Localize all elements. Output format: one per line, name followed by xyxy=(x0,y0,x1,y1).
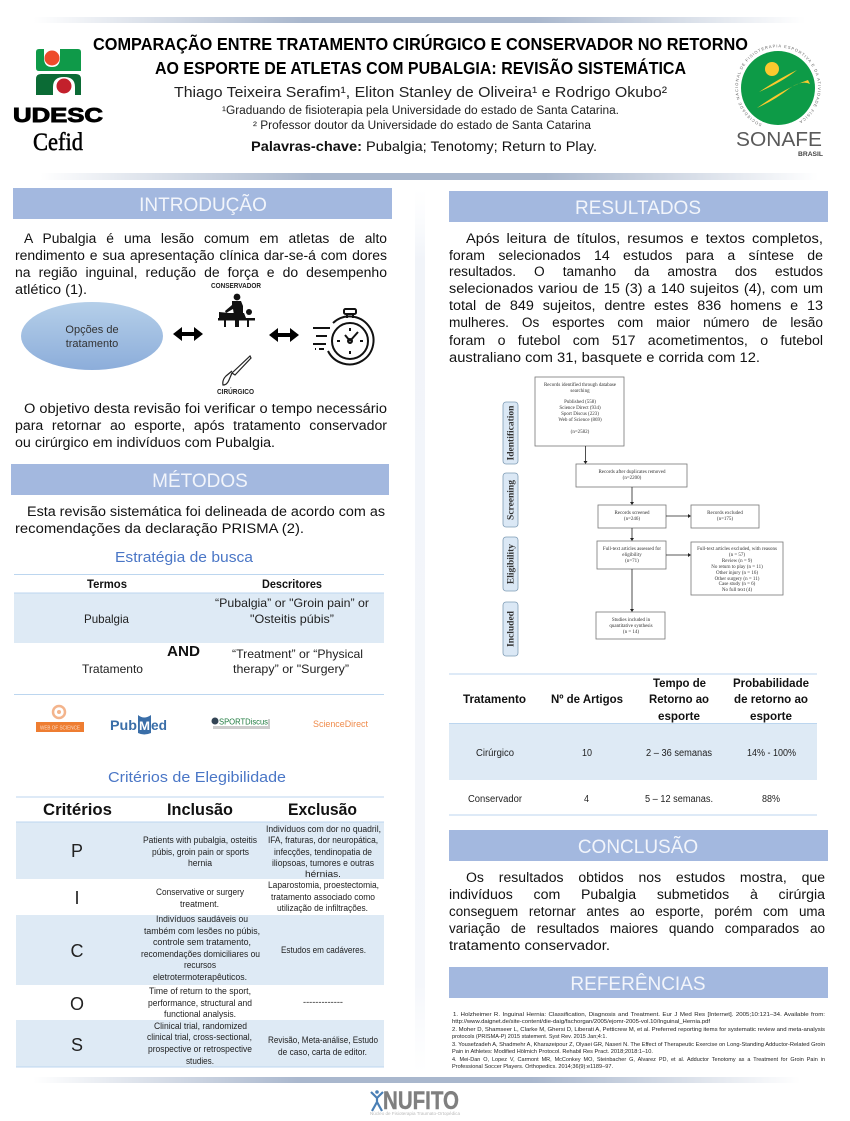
table rows: 5 – 12 semanas. xyxy=(645,794,713,805)
table rows: Cirúrgico xyxy=(476,748,514,759)
text block: referências: 1. Holzheimer R. Inguinal Hernia: Classification, Diagnosis and Treatment. Eur J Med Res [Internet]. 2005;10:121–34. Available from: xyxy=(453,1012,825,1018)
text block: introdução: atlético (1). xyxy=(15,282,87,297)
box: identification: Sport Discus (223) xyxy=(561,412,599,417)
box: excluded: Records excluded xyxy=(707,511,743,516)
criteria letters: C xyxy=(70,941,84,961)
inclusion column: hernia xyxy=(188,858,212,868)
text block: conclusão: conseguem retornar antes ao esporte, porém com uma xyxy=(449,904,825,919)
inclusion column: também com lesões no púbis, xyxy=(144,926,260,936)
heading: introdução xyxy=(13,188,392,219)
ellipse: opções de tratamento xyxy=(21,302,163,370)
text block: referências: Professional Soccer Players. Orthopedics. 2014;36(9):e1189–97. xyxy=(452,1064,613,1070)
criteria letters: I xyxy=(74,888,80,908)
text block: métodos: Esta revisão sistemática foi delineada de acordo com as xyxy=(27,504,385,519)
heading: resultados xyxy=(449,191,828,222)
box: screened: Records screened xyxy=(614,511,650,516)
table header xyxy=(463,676,809,723)
text block: introdução: na região inguinal, redução de força e do desempenho xyxy=(15,265,387,280)
table header: Tratamento xyxy=(463,692,526,706)
logo: PubMed: M xyxy=(139,719,150,733)
text block: referências: Pain in Athletes: Modified Hölmich Protocol. Rehabil Res Pract. 2018;2018:1–10. xyxy=(452,1049,653,1055)
table header: esporte xyxy=(750,709,792,723)
criteria letters: P xyxy=(71,841,83,861)
text block: referências: 3. Yousefzadeh A, Shadmehr A, Kharazeipour Z, Olyaei GR, Naseri N. The Effect of Therapeutic Exercise on Long-Standing Adductor-Related Groin xyxy=(452,1042,825,1048)
logos: databases xyxy=(36,706,368,734)
table header: Retorno ao xyxy=(649,692,709,706)
diagram: opções de tratamento xyxy=(21,283,374,396)
panel: referências xyxy=(449,967,828,1070)
text block: métodos xyxy=(15,504,385,536)
keywords: Palavras-chave: Pubalgia; Tenotomy; Return to Play. xyxy=(251,138,597,154)
heading: métodos: MÉTODOS xyxy=(152,471,248,492)
exclusion column: iliopsoas, tumores e outras xyxy=(272,858,374,868)
box: identification: searching xyxy=(570,389,590,394)
table rows: 14% - 100% xyxy=(747,748,796,759)
panel: métodos xyxy=(11,464,389,1067)
box: included: (n = 14) xyxy=(623,630,639,635)
text block: objetivo: O objetivo desta revisão foi verificar o tempo necessário xyxy=(24,401,387,416)
logo: SPORTDiscus: SPORTDiscus xyxy=(219,718,268,726)
text block: referências: 2. Moher D, Shamseer L, Clarke M, Ghersi D, Liberati A, Petticrew M, et al. Preferred reporting items for systematic review and meta-analysis xyxy=(452,1027,825,1033)
authors: Thiago Teixeira Serafim¹, Eliton Stanley de Oliveira¹ e Rodrigo Okubo² xyxy=(174,84,667,101)
inclusion column: recursos xyxy=(184,960,216,970)
box: identification: Web of Science (869) xyxy=(558,418,602,423)
label: conservador: CONSERVADOR xyxy=(211,283,261,290)
affiliations xyxy=(222,105,619,132)
box: excluded with reasons: Other surgery (n = 11) xyxy=(715,577,760,582)
exclusion column: infecções, tendinopatia de xyxy=(274,847,372,857)
label: cirúrgico: CIRÚRGICO xyxy=(217,387,255,396)
table: estratégia de busca xyxy=(14,574,384,694)
box: excluded with reasons: (n = 57) xyxy=(729,553,745,558)
text block: resultados: foram o futebol com 517 acometimentos, o futebol xyxy=(449,333,823,348)
box: identification: Records identified through database xyxy=(544,383,617,388)
exclusion column: ------------- xyxy=(303,997,343,1007)
stage labels: Eligibility xyxy=(506,544,516,584)
heading: referências: REFERÊNCIAS xyxy=(570,973,706,995)
inclusion column: prospective or retrospective xyxy=(148,1044,252,1054)
box: excluded with reasons: No return to play (n = 11) xyxy=(711,565,763,570)
text block: referências: 4. Mei-Dan O, Lopez V, Carmont MR, McConkey MO, Steinbacher G, Alvarez PD, et al. Adductor Tenotomy as a Treatment for Groin Pain in xyxy=(452,1057,825,1063)
stage labels xyxy=(503,402,518,656)
criteria letters: S xyxy=(71,1035,83,1055)
box: screened: (n=246) xyxy=(624,517,640,522)
exclusion column: Revisão, Meta-análise, Estudo xyxy=(268,1035,378,1045)
arrows xyxy=(584,446,691,612)
logo: UDESC Cefid: Cefid xyxy=(33,129,83,156)
icon: stopwatch xyxy=(313,309,374,364)
table header: Critérios xyxy=(43,800,112,819)
table: estratégia de busca: therapy” or "Surgery” xyxy=(233,662,349,676)
logo: SPORTDiscus xyxy=(210,716,270,729)
panel: introdução xyxy=(13,188,392,450)
text block: introdução: rendimento e sua apresentação clínica dar-se-á com dores xyxy=(15,248,387,263)
flowchart: PRISMA xyxy=(503,377,783,656)
inclusion column: Indivíduos saudáveis ou xyxy=(156,914,248,924)
text block: resultados: selecionados variou de 15 (3) a 140 sujeitos (4), com um xyxy=(449,281,823,296)
box: duplicates removed xyxy=(576,464,687,487)
stage labels: Identification xyxy=(506,405,516,460)
exclusion column: IFA, fraturas, dor neuropática, xyxy=(268,835,378,845)
heading: critérios de elegibilidade: Critérios de Elegibilidade xyxy=(108,769,286,786)
stage labels: Included xyxy=(506,610,516,647)
table header xyxy=(43,800,357,819)
title xyxy=(93,33,748,78)
table rows: 4 xyxy=(584,794,589,805)
box: identification xyxy=(535,377,624,446)
table rows: 88% xyxy=(762,794,780,805)
inclusion column: púbis, groin pain or sports xyxy=(152,847,249,857)
inclusion column: Clinical trial, randomized xyxy=(154,1021,247,1031)
box: included: quantitative synthesis xyxy=(609,624,653,629)
box: included xyxy=(596,612,665,639)
text block: resultados: australiano com 31, basquete e corrida com 12. xyxy=(449,350,760,365)
inclusion column: performance, structural and xyxy=(148,998,252,1008)
inclusion column: eletrotermoterapêuticos. xyxy=(153,972,247,982)
arrow: double xyxy=(173,327,203,341)
table rows xyxy=(468,748,796,805)
title: AO ESPORTE DE ATLETAS COM PUBALGIA: REVISÃO SISTEMÁTICA xyxy=(155,57,686,78)
table header: de retorno ao xyxy=(734,692,808,706)
text block: conclusão: tratamento conservador. xyxy=(449,938,610,953)
table header: Exclusão xyxy=(288,800,357,819)
logo: Web of Science: WEB OF SCIENCE xyxy=(40,726,81,732)
table header: Nº de Artigos xyxy=(551,692,623,706)
box: excluded xyxy=(691,505,759,528)
text block: referências: http://www.daignet.de/site-content/die-daig/fachorgan/2005/ejomr-2005-vol.10/Inguinal_Hernia.pdf xyxy=(452,1019,710,1025)
logo: SONAFE: SOCIEDADE NACIONAL DE FISIOTERAPIA ESPORTIVA E DA ATIVIDADE FÍSICA xyxy=(735,44,821,126)
table: estratégia de busca: Descritores xyxy=(262,577,322,591)
inclusion column: Conservative or surgery xyxy=(156,887,244,897)
table header: esporte xyxy=(658,709,700,723)
inclusion column: Time of return to the sport, xyxy=(149,986,251,996)
table: estratégia de busca: “Treatment” or “Physical xyxy=(232,647,363,661)
text block: conclusão: variação de resultados maiores quando comparados ao xyxy=(449,921,825,936)
logo: Web of Science xyxy=(36,706,84,732)
box: eligibility xyxy=(597,541,666,569)
inclusion column: recomendações domiciliares ou xyxy=(141,949,260,959)
table header: Probabilidade xyxy=(733,676,809,690)
inclusion column: functional analysis. xyxy=(164,1009,236,1019)
logo: PubMed: ed xyxy=(151,717,167,733)
table: estratégia de busca: “Pubalgia” or "Groin pain” or xyxy=(215,596,369,610)
box: eligibility: Full-text articles assessed for xyxy=(603,547,661,552)
exclusion column: Laparostomia, proestectomia, xyxy=(268,880,379,890)
inclusion column xyxy=(141,835,260,1066)
text block: referências: protocols (PRISMA-P) 2015 statement. Syst Rev. 2015 Jan;4:1. xyxy=(452,1034,607,1040)
text block: conclusão xyxy=(449,870,826,953)
icon: scalpel xyxy=(223,356,251,385)
inclusion column: clinical trial, cross-sectional, xyxy=(147,1032,252,1042)
logo: SONAFE: BRASIL xyxy=(798,151,823,158)
heading: referências xyxy=(449,967,828,998)
criteria letters xyxy=(70,841,84,1055)
table: estratégia de busca: Termos xyxy=(87,577,127,591)
affiliations: ² Professor doutor da Universidade do estado de Santa Catarina xyxy=(253,120,592,132)
logo: NUFITO: Núcleo de Fisioterapia Traumato-Ortopédica xyxy=(370,1111,461,1116)
box: excluded with reasons: Case study (n = 6) xyxy=(719,582,756,587)
table: estratégia de busca: "Osteitis púbis” xyxy=(250,612,334,626)
text block: objetivo: ou cirúrgico em indivíduos com Pubalgia. xyxy=(15,435,275,450)
affiliations: ¹Graduando de fisioterapia pela Universidade do estado de Santa Catarina. xyxy=(222,105,619,117)
inclusion column: Patients with pubalgia, osteitis xyxy=(143,835,257,845)
heading: conclusão: CONCLUSÃO xyxy=(578,836,698,858)
box: screened xyxy=(598,505,666,528)
text block: conclusão: indivíduos com Pubalgia submetidos à cirúrgia xyxy=(449,887,826,902)
table rows: 2 – 36 semanas xyxy=(646,748,712,759)
arrow: double xyxy=(269,328,299,342)
heading: introdução: INTRODUÇÃO xyxy=(139,194,267,216)
logo: UDESC Cefid xyxy=(13,49,103,156)
table: resultados xyxy=(449,674,817,815)
table: critérios de elegibilidade xyxy=(16,797,384,1067)
heading: resultados: RESULTADOS xyxy=(575,198,701,219)
exclusion column: tratamento associado como xyxy=(271,892,375,902)
logo: PubMed xyxy=(110,715,167,734)
text block: referências xyxy=(452,1012,825,1070)
table: estratégia de busca: Pubalgia xyxy=(84,612,129,626)
logo: PubMed: Pub xyxy=(110,717,137,733)
icon: massage therapy xyxy=(218,294,255,327)
exclusion column: utilização de infiltrações. xyxy=(277,903,368,913)
label: AND: AND xyxy=(167,643,200,660)
logo: ScienceDirect: ScienceDirect xyxy=(313,719,368,730)
logo: NUFITO: NUFITO xyxy=(383,1087,459,1115)
title: COMPARAÇÃO ENTRE TRATAMENTO CIRÚRGICO E CONSERVADOR NO RETORNO xyxy=(93,33,748,54)
heading: conclusão xyxy=(449,830,828,861)
box: included: Studies included in xyxy=(612,618,651,623)
text block: resultados: total de 849 sujeitos, dentre estes 836 homens e 13 xyxy=(449,298,823,313)
inclusion column: studies. xyxy=(186,1056,214,1066)
box: excluded with reasons: Full-text articles excluded, with reasons xyxy=(697,547,777,552)
text block: objetivo xyxy=(15,401,388,450)
box: excluded with reasons: No full text (4) xyxy=(722,588,752,593)
table header: Inclusão xyxy=(167,800,233,819)
text block: introdução xyxy=(15,231,387,297)
table header: Tempo de xyxy=(653,676,706,690)
panel: resultados xyxy=(449,191,828,815)
text block: resultados: Após leitura de títulos, resumos e textos completos, xyxy=(466,231,823,246)
box: duplicates removed: (n=2200) xyxy=(623,476,642,481)
box: identification: Science Direct (934) xyxy=(559,406,601,411)
text block: resultados: resultados. O tamanho da amostra dos estudos xyxy=(449,264,823,279)
text block: introdução: A Pubalgia é uma lesão comum em atletas de alto xyxy=(24,231,387,246)
ellipse: opções de tratamento: Opções de xyxy=(65,324,119,336)
text block: resultados: mulheres. Os esportes com maior número de lesão xyxy=(449,315,823,330)
table: estratégia de busca: Tratamento xyxy=(82,662,143,676)
logo: UDESC Cefid: UDESC xyxy=(13,105,103,127)
exclusion column: Estudos em cadáveres. xyxy=(281,945,366,955)
stage labels: Screening xyxy=(506,480,516,520)
box: identification: Published (558) xyxy=(564,400,596,405)
text block: objetivo: para retornar ao esporte, após tratamento conservador xyxy=(15,418,388,433)
table rows: 10 xyxy=(582,748,592,759)
box: excluded: (n=175) xyxy=(717,517,733,522)
text block: resultados xyxy=(449,231,823,365)
heading: estratégia de busca: Estratégia de busca xyxy=(115,549,254,566)
logo: SONAFE: SONAFE xyxy=(736,129,822,151)
box: duplicates removed: Records after duplicates removed xyxy=(598,470,666,475)
ellipse: opções de tratamento: tratamento xyxy=(66,338,118,350)
box: excluded with reasons: Other injury (n = 16) xyxy=(716,571,758,576)
heading: métodos xyxy=(11,464,389,495)
criteria letters: O xyxy=(70,994,84,1014)
box: identification: (n=2582) xyxy=(571,430,590,435)
text block: métodos: recomendações da declaração PRISMA (2). xyxy=(15,521,304,536)
inclusion column: controle sem tratamento, xyxy=(153,937,251,947)
box: excluded with reasons xyxy=(691,542,783,595)
box: excluded with reasons: Review (n = 9) xyxy=(722,559,752,564)
exclusion column: hérnias. xyxy=(305,869,341,879)
panel: conclusão xyxy=(449,830,828,953)
exclusion column: Indivíduos com dor no quadril, xyxy=(266,824,381,834)
box: eligibility: eligibility xyxy=(622,553,642,558)
inclusion column: treatment. xyxy=(180,899,219,909)
box: eligibility: (n=71) xyxy=(625,559,639,564)
exclusion column: de caso, carta de editor. xyxy=(278,1047,367,1057)
exclusion column xyxy=(266,824,381,1057)
text block: resultados: foram selecionados 14 estudos para a síntese de xyxy=(449,248,823,263)
text block: conclusão: Os resultados obtidos nos estudos mostra, que xyxy=(466,870,825,885)
table rows: Conservador xyxy=(468,794,523,805)
